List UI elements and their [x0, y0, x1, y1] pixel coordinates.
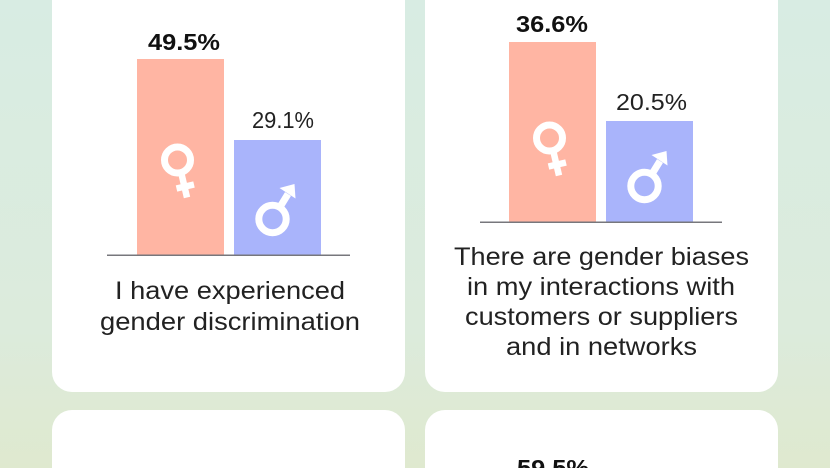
- male value: 20.5%: [616, 89, 687, 115]
- baseline: [480, 222, 722, 223]
- caption: There are gender biases: [454, 243, 749, 271]
- bar chart: experienced discrimination: [107, 29, 350, 256]
- panel: gender biases in interactions: [425, 0, 778, 392]
- caption: [454, 243, 749, 361]
- icon: female symbol: [164, 147, 194, 198]
- caption: in my interactions with: [467, 273, 735, 301]
- caption: customers or suppliers: [465, 303, 738, 331]
- bar chart: gender biases: [480, 11, 722, 223]
- icon: male symbol: [631, 151, 668, 200]
- icon: female symbol: [536, 125, 566, 176]
- caption: I have experienced: [115, 277, 345, 305]
- panel: lower right card: [425, 410, 778, 468]
- icon: male symbol: [259, 184, 296, 233]
- panel: lower left card: [52, 410, 405, 468]
- caption: [100, 277, 360, 336]
- male value: 29.1%: [252, 107, 314, 133]
- male bar: [606, 121, 693, 222]
- panel: experienced gender discrimination: [52, 0, 405, 392]
- female value: 49.5%: [148, 29, 220, 55]
- baseline: [107, 254, 350, 256]
- female bar: [509, 42, 596, 222]
- male bar: [234, 140, 321, 255]
- female bar: [137, 59, 224, 255]
- caption: and in networks: [506, 333, 697, 361]
- caption: gender discrimination: [100, 308, 360, 336]
- female value: 36.6%: [516, 11, 588, 37]
